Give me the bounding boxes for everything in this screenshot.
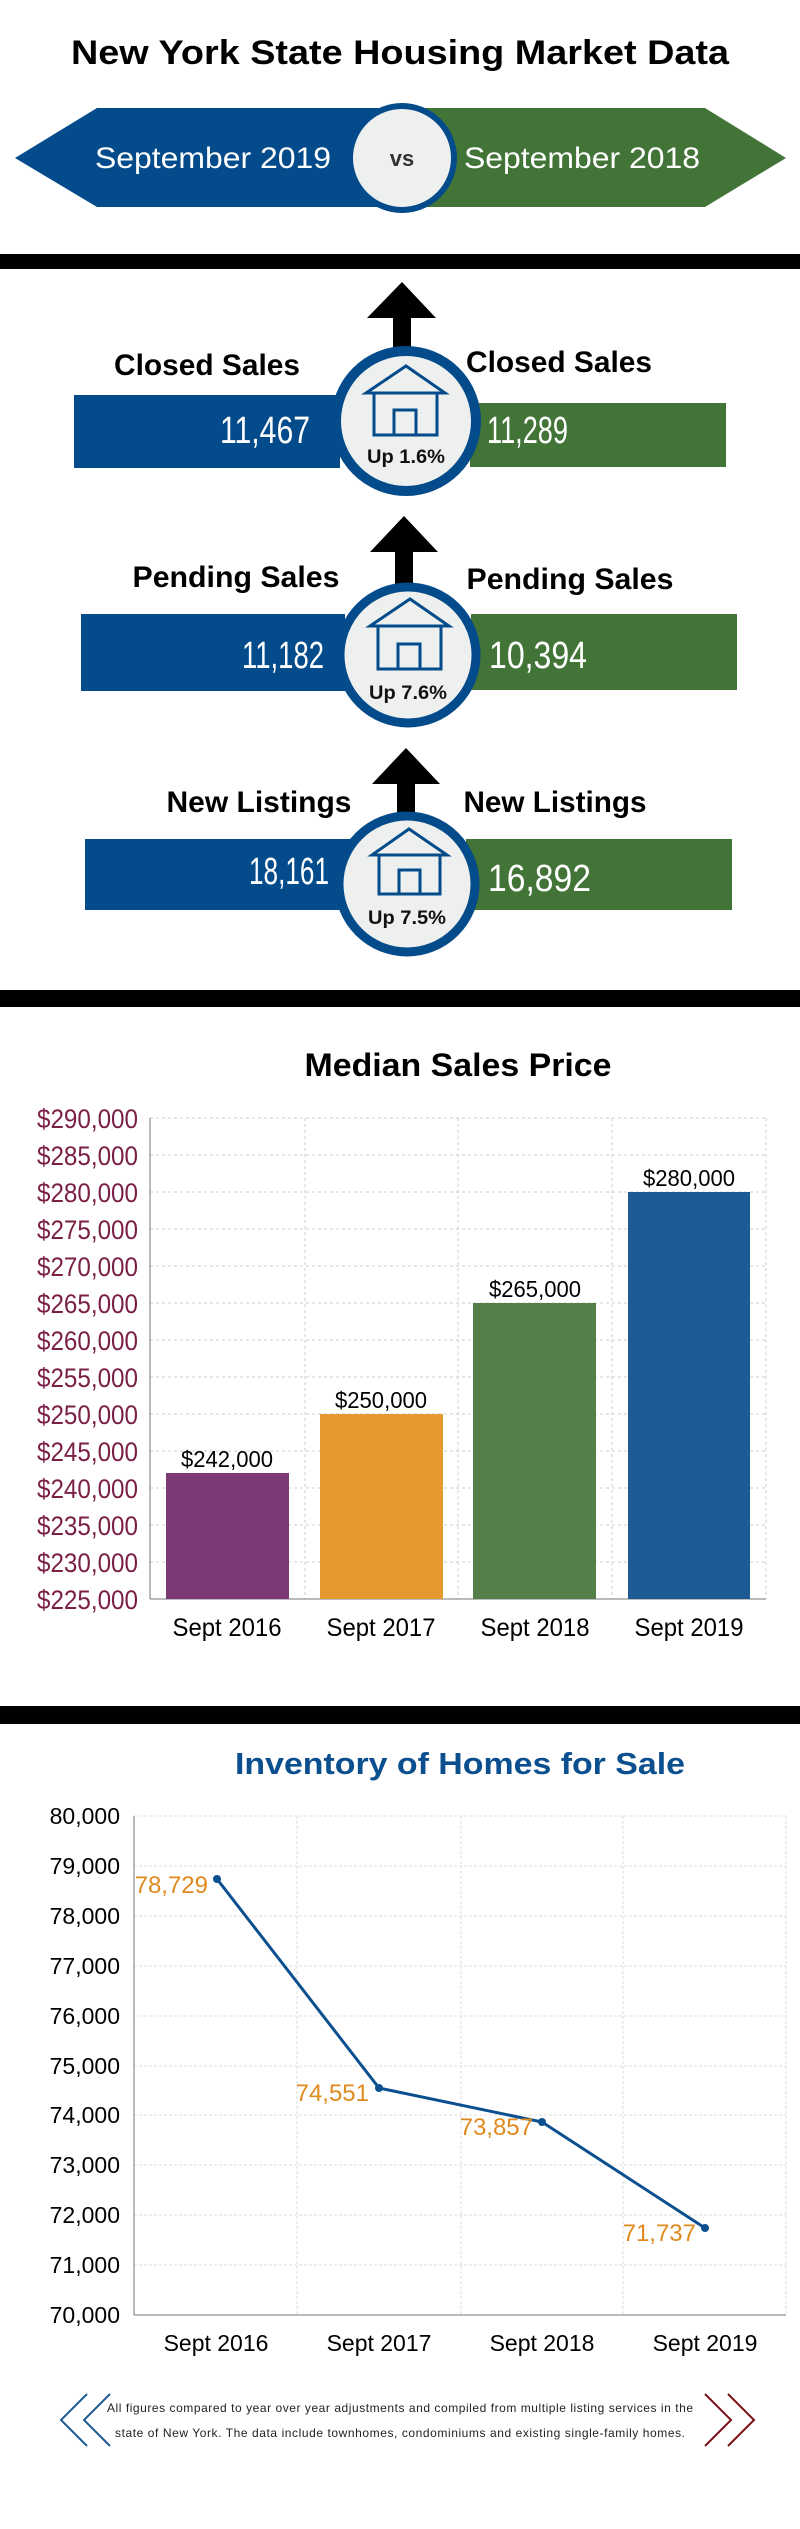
panel: new listings: 16,892 — [488, 858, 591, 900]
panel: pending sales: Pending Sales — [132, 561, 340, 594]
bar chart: median sales price: Sept 2017 — [326, 1614, 436, 1642]
line chart: inventory: 74,000 — [50, 2102, 120, 2128]
line chart: inventory: 71,000 — [50, 2252, 120, 2278]
bar chart: median sales price: $250,000 — [335, 1387, 427, 1413]
icon: house — [372, 829, 447, 894]
bar chart: median sales price: Sept 2019 — [634, 1614, 744, 1642]
line chart: inventory: 74,551 — [296, 2080, 369, 2107]
line chart: inventory: 71,737 — [623, 2220, 696, 2247]
bar chart: median sales price: $242,000 — [181, 1446, 273, 1472]
bar chart: median sales price: $250,000 — [37, 1400, 138, 1430]
arrow: up — [372, 748, 440, 815]
icon: right chevrons — [705, 2394, 754, 2446]
arrow: up — [367, 282, 436, 352]
panel: closed sales: 11,467 — [220, 410, 310, 452]
bar chart: median sales price: Sept 2016 — [172, 1614, 282, 1642]
panel: pending sales: 10,394 — [489, 635, 587, 677]
line chart: inventory: Sept 2019 — [653, 2330, 757, 2356]
heading: median sales price: Median Sales Price — [304, 1047, 612, 1083]
line chart: inventory: 78,729 — [135, 1872, 208, 1899]
footer note: All figures compared to year over year adjustments and compiled from multiple listing services in the — [107, 2401, 693, 2415]
panel: pending sales: 11,182 — [242, 635, 324, 677]
banner: September 2019 vs September 2018: vs — [390, 146, 414, 171]
bar chart: median sales price: $280,000 — [643, 1165, 735, 1191]
panel: pending sales: Pending Sales — [466, 563, 674, 596]
line chart: inventory: Sept 2017 — [327, 2330, 431, 2356]
bar chart: median sales price: $230,000 — [37, 1548, 138, 1578]
footer note — [61, 2394, 754, 2446]
panel: new listings: New Listings — [464, 786, 646, 819]
line chart: inventory: 75,000 — [50, 2053, 120, 2079]
line chart: inventory — [50, 1803, 786, 2356]
bar chart: median sales price: $240,000 — [37, 1474, 138, 1504]
line chart: inventory: 79,000 — [50, 1853, 120, 1879]
panel: closed sales: Closed Sales — [466, 346, 652, 379]
panel: new listings — [85, 748, 732, 952]
line chart: inventory: 77,000 — [50, 1953, 120, 1979]
icon: left chevrons — [61, 2394, 110, 2446]
bar chart: median sales price: Sept 2018 — [480, 1614, 590, 1642]
banner: September 2019 vs September 2018: September 2019 — [95, 142, 331, 175]
panel: pending sales: Up 7.6% — [369, 683, 447, 704]
line chart: inventory: 72,000 — [50, 2202, 120, 2228]
line chart: inventory: 76,000 — [50, 2003, 120, 2029]
panel: new listings: New Listings — [166, 786, 352, 819]
bar chart: median sales price: $235,000 — [37, 1511, 138, 1541]
bar chart: median sales price: $255,000 — [37, 1363, 138, 1393]
line chart: inventory: 70,000 — [50, 2302, 120, 2328]
bar chart: median sales price — [37, 1104, 766, 1642]
bar chart: median sales price: $225,000 — [37, 1585, 138, 1615]
panel: closed sales: 11,289 — [487, 410, 568, 452]
heading: inventory of homes for sale: Inventory of Homes for Sale — [235, 1746, 685, 1781]
line chart: inventory: Sept 2018 — [490, 2330, 594, 2356]
panel: closed sales: Closed Sales — [114, 349, 300, 382]
panel: new listings: 18,161 — [249, 851, 329, 893]
footer note: state of New York. The data include townhomes, condominiums and existing single-family homes. — [115, 2426, 685, 2440]
panel: new listings: Up 7.5% — [368, 908, 446, 929]
line chart: inventory: Sept 2016 — [164, 2330, 268, 2356]
bar chart: median sales price: $285,000 — [37, 1141, 138, 1171]
line chart: inventory: 78,000 — [50, 1903, 120, 1929]
panel: closed sales: Up 1.6% — [367, 447, 445, 468]
banner: September 2019 vs September 2018 — [15, 106, 786, 210]
bar chart: median sales price: $280,000 — [37, 1178, 138, 1208]
line chart: inventory: 80,000 — [50, 1803, 120, 1829]
arrow: up — [370, 516, 438, 585]
bar chart: median sales price: $275,000 — [37, 1215, 138, 1245]
banner: September 2019 vs September 2018: September 2018 — [464, 142, 700, 175]
line chart: inventory: 73,857 — [460, 2114, 533, 2141]
bar chart: median sales price: $270,000 — [37, 1252, 138, 1282]
panel: closed sales — [74, 282, 726, 491]
icon: house — [370, 599, 449, 669]
bar chart: median sales price: $265,000 — [489, 1276, 581, 1302]
line chart: inventory: 73,000 — [50, 2152, 120, 2178]
bar chart: median sales price: $290,000 — [37, 1104, 138, 1134]
bar chart: median sales price: $260,000 — [37, 1326, 138, 1356]
bar chart: median sales price: $245,000 — [37, 1437, 138, 1467]
bar chart: median sales price: $265,000 — [37, 1289, 138, 1319]
icon: house — [366, 366, 445, 435]
panel: pending sales — [81, 516, 737, 723]
title: New York State Housing Market Data — [71, 34, 730, 72]
